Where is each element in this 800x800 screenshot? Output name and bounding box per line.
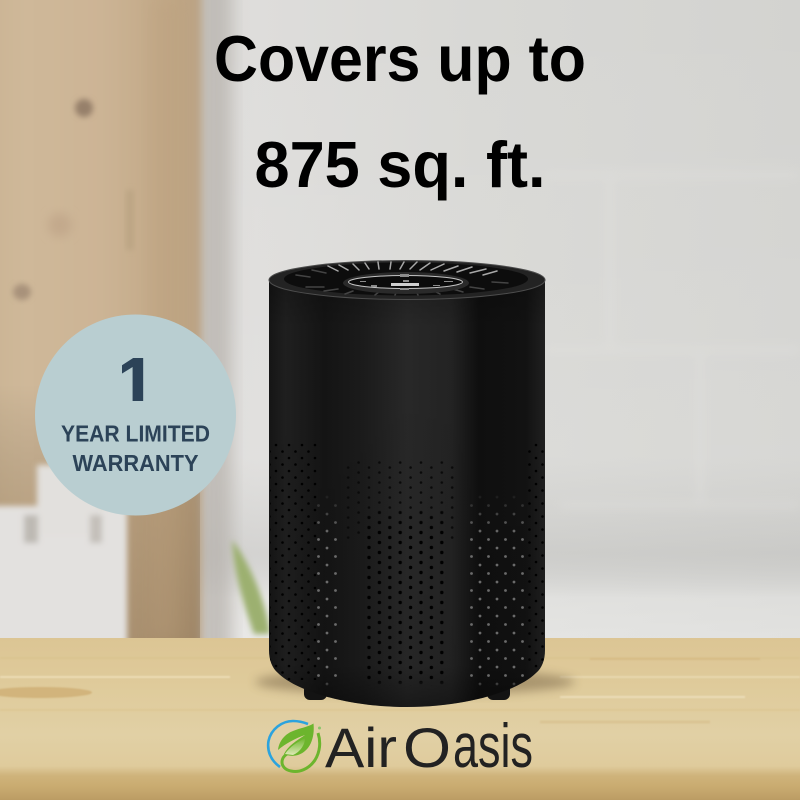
perforated dots: right highlights	[470, 496, 524, 686]
logo icon: green arc	[282, 733, 320, 772]
perforated dots: upper center	[345, 460, 460, 540]
control panel ring	[348, 276, 462, 288]
purifier cylindrical body	[269, 265, 545, 710]
logo icon: leaf	[278, 724, 314, 756]
logo wordmark: asis	[453, 712, 533, 781]
table wood knot	[0, 687, 92, 698]
wooden tabletop	[0, 638, 800, 800]
purifier feet	[304, 684, 510, 700]
title line 2: 875 sq. ft.	[254, 128, 546, 201]
logo wordmark	[325, 712, 533, 781]
purifier top rim	[269, 260, 545, 300]
warranty badge	[35, 314, 236, 516]
purifier contact shadow	[255, 669, 575, 695]
perforated dots: left highlights	[317, 496, 337, 686]
logo icon: trademark dot	[318, 726, 321, 730]
control panel icons	[360, 274, 453, 290]
purifier top grille	[284, 262, 528, 296]
title line 1: Covers up to	[214, 22, 586, 95]
badge number: 1	[115, 342, 157, 428]
perforated dots: right edge	[528, 444, 544, 668]
logo wordmark: Air	[325, 716, 397, 779]
control panel oval	[343, 272, 469, 294]
logo icon: blue arc	[268, 721, 308, 767]
logo icon: leaf highlight	[285, 738, 305, 755]
perforated dots: lower center	[367, 511, 444, 684]
background: blurred green plant	[232, 540, 270, 634]
badge text line 2: WARRANTY	[72, 450, 198, 476]
badge text line 1: YEAR LIMITED	[61, 420, 210, 446]
title	[214, 22, 586, 201]
air purifier	[255, 260, 575, 710]
badge circle	[35, 314, 236, 516]
logo wordmark: O	[403, 716, 451, 779]
perforated dots: left side	[270, 440, 320, 680]
Air Oasis logo	[268, 712, 533, 781]
control panel display bar	[391, 283, 419, 286]
background: blurred wooden panel	[0, 0, 202, 660]
background: blurred white box	[0, 465, 127, 646]
